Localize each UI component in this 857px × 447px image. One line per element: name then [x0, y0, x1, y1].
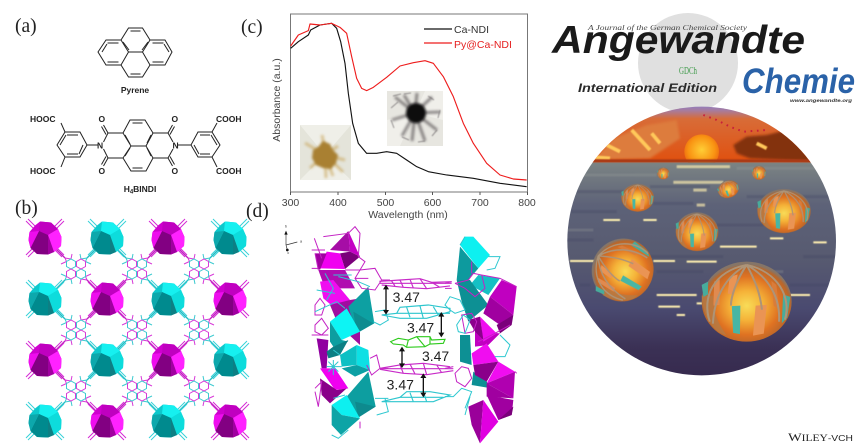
left column of polyhedra	[312, 227, 390, 438]
H4BINDI atom labels	[30, 114, 242, 176]
x axis tick labels: 800	[518, 197, 536, 209]
left magenta polyhedra	[315, 231, 360, 403]
distance values: 3.47	[393, 289, 420, 305]
distance values: 3.47	[422, 348, 449, 364]
water texture	[563, 168, 837, 285]
International Edition: International Edition	[578, 81, 717, 95]
label (b): (b)	[15, 198, 38, 219]
axis triad: c	[287, 251, 289, 255]
axis triad	[284, 224, 303, 255]
panel b: crystal packing lattice	[15, 198, 249, 440]
lanterns far	[621, 166, 766, 212]
H4BINDI atom labels: COOH	[216, 114, 242, 124]
publisher logo: WILEY -VCH	[788, 430, 853, 444]
horizon	[563, 159, 840, 162]
cover artwork: sunset sea with lanterns	[563, 105, 840, 377]
water glints	[570, 167, 827, 315]
right column of polyhedra	[445, 237, 517, 443]
lantern left large	[592, 238, 654, 302]
cover grey circle	[638, 13, 738, 113]
axis triad: b	[285, 224, 287, 228]
sea	[563, 162, 840, 377]
pyrene structure	[98, 28, 172, 77]
panel a: molecular structures	[15, 16, 242, 196]
legend: Ca-NDI	[454, 24, 489, 36]
H4BINDI atom labels: N	[97, 140, 103, 150]
chart frame and ticks	[290, 14, 528, 195]
y axis title: Absorbance (a.u.)	[271, 58, 283, 142]
clouds	[587, 115, 817, 162]
x axis tick labels: 300	[282, 197, 299, 209]
curve: Ca-NDI	[291, 23, 527, 187]
H4BINDI atom labels: O	[98, 166, 106, 176]
panel: journal cover	[551, 13, 855, 444]
H4BINDI atom labels: HOOC	[30, 166, 56, 176]
H4BINDI atom labels: HOOC	[30, 114, 56, 124]
x axis tick labels: 600	[424, 197, 441, 209]
x axis tick labels	[282, 197, 536, 209]
lanterns middle	[676, 189, 811, 251]
lantern front large	[702, 262, 792, 342]
ligand layers	[379, 279, 453, 402]
panel c: absorbance chart	[241, 14, 536, 221]
panel d: stacked crystal structure	[246, 201, 517, 443]
x axis tick labels: 700	[471, 197, 489, 209]
left cyan polyhedra	[327, 287, 376, 435]
GDCh logo: GDCh	[679, 66, 697, 77]
distance values	[387, 289, 449, 392]
distance values: 3.47	[407, 319, 434, 335]
H4BINDI atom labels: O	[172, 114, 178, 124]
website: www.angewandte.org	[790, 98, 852, 104]
photo inset: Ca-NDI	[300, 125, 351, 180]
distance arrows	[383, 285, 444, 397]
structure centre	[284, 224, 453, 402]
right magenta polyhedra	[468, 280, 517, 443]
sky	[592, 106, 811, 162]
H4BINDI caption: H	[124, 184, 130, 194]
x axis title: Wavelength (nm)	[368, 209, 448, 221]
label (a): (a)	[15, 16, 37, 37]
H4BINDI atom labels: O	[172, 166, 178, 176]
distance values: 3.47	[387, 376, 414, 392]
H4BINDI atom labels: O	[98, 114, 106, 124]
sun	[684, 134, 719, 162]
lattice metal nodes	[26, 219, 249, 440]
left framework wires	[312, 227, 390, 438]
right cyan polyhedra	[457, 237, 500, 388]
label (d): (d)	[246, 201, 269, 222]
H4BINDI structure	[57, 120, 220, 171]
x axis tick labels: 400	[329, 197, 347, 209]
right framework wires	[445, 237, 517, 415]
H4BINDI atom labels: COOH	[216, 166, 242, 176]
photo inset: Py@Ca-NDI	[387, 91, 443, 146]
H4BINDI caption: 4	[130, 190, 134, 196]
legend	[424, 24, 512, 51]
pyrene caption: Pyrene	[121, 85, 149, 95]
journal title Angewandte: Angewandte	[551, 19, 805, 62]
lattice linkers	[54, 247, 221, 413]
axis triad: a	[300, 239, 303, 243]
label (c): (c)	[241, 17, 263, 38]
H4BINDI atom labels: N	[172, 140, 179, 150]
legend: Py@Ca-NDI	[454, 39, 512, 51]
x axis tick labels: 500	[377, 197, 394, 209]
curve: Py@Ca-NDI	[291, 23, 527, 180]
journal subtitle: A Journal of the German Chemical Society	[587, 23, 748, 32]
H4BINDI caption: BINDI	[133, 184, 156, 194]
